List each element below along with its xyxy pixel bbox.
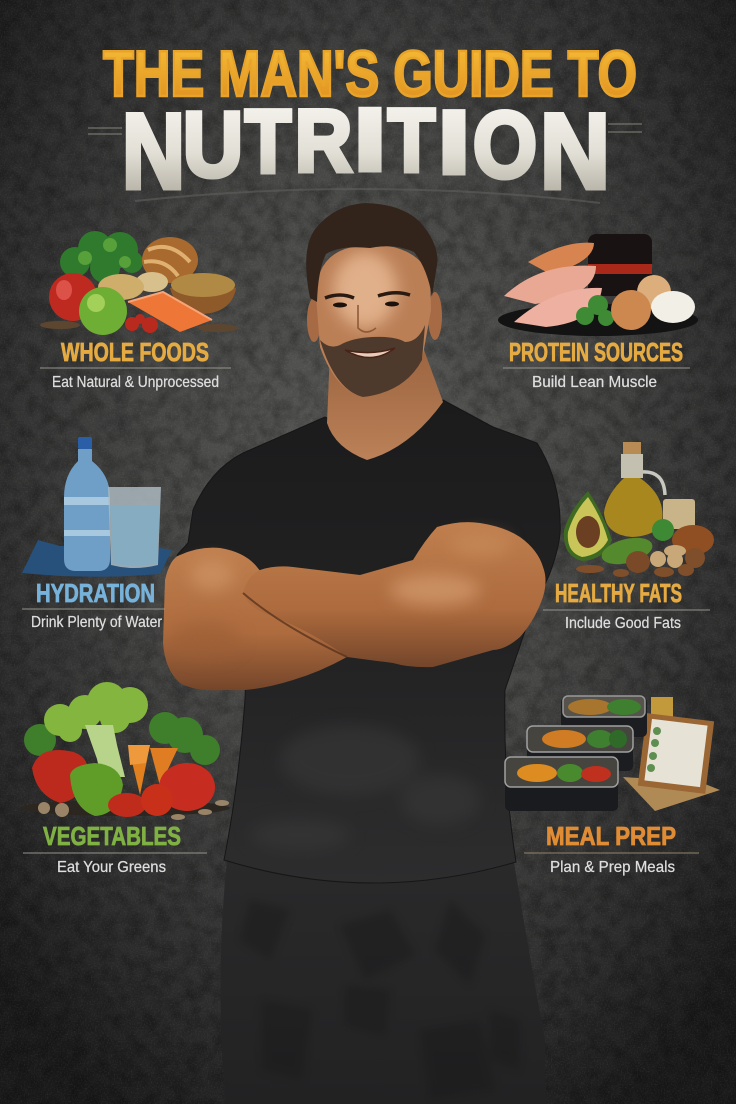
title line: nutrition: U xyxy=(183,94,243,196)
eyebrows xyxy=(325,293,410,298)
heading: hydration: HYDRATION xyxy=(36,578,155,608)
icon: hydration xyxy=(22,437,172,577)
title line: nutrition: N xyxy=(540,91,610,211)
shorts camo shading xyxy=(240,900,520,1100)
arm crease xyxy=(243,593,347,657)
nose xyxy=(358,305,376,332)
eyes xyxy=(333,302,399,308)
panel: vegetables xyxy=(20,682,230,876)
smile xyxy=(345,348,395,358)
arm: right forearm on top xyxy=(243,522,546,667)
heading: whole foods: WHOLE FOODS xyxy=(61,337,209,367)
shorts xyxy=(220,850,546,1104)
hair xyxy=(306,203,437,302)
title line: nutrition: R xyxy=(295,91,352,190)
shirt torso xyxy=(177,400,560,883)
icon: healthy fats xyxy=(564,442,714,577)
face highlight xyxy=(333,252,397,328)
title xyxy=(103,37,637,211)
title line: nutrition: T xyxy=(388,90,435,190)
caption: protein sources: Build Lean Muscle xyxy=(532,374,657,391)
head xyxy=(316,245,431,397)
arm highlights xyxy=(170,533,510,658)
neck xyxy=(327,350,443,460)
panel: hydration xyxy=(22,437,172,631)
ears xyxy=(307,292,442,342)
beard xyxy=(320,325,425,397)
icon: vegetables xyxy=(20,682,230,820)
panel: healthy fats xyxy=(543,442,714,632)
arm: left upper arm and fist xyxy=(163,548,347,690)
panel: protein sources xyxy=(498,234,698,391)
heading: vegetables: VEGETABLES xyxy=(43,821,181,851)
caption: healthy fats: Include Good Fats xyxy=(565,615,681,632)
title line: nutrition xyxy=(122,90,610,211)
panel: meal prep xyxy=(505,696,720,876)
caption: vegetables: Eat Your Greens xyxy=(57,859,166,876)
title line: nutrition: I xyxy=(354,90,386,189)
panel: whole foods xyxy=(40,231,238,391)
title line: nutrition: N xyxy=(122,91,185,211)
caption: meal prep: Plan & Prep Meals xyxy=(550,859,675,876)
title line: nutrition: O xyxy=(473,92,537,197)
shirt mottling xyxy=(250,725,480,851)
icon: whole foods xyxy=(40,231,238,335)
title underline arc xyxy=(135,189,600,203)
heading: meal prep: MEAL PREP xyxy=(546,821,676,851)
title line: nutrition: I xyxy=(438,92,470,192)
icon: protein sources xyxy=(498,234,698,336)
caption: hydration: Drink Plenty of Water xyxy=(31,614,163,631)
caption: whole foods: Eat Natural & Unprocessed xyxy=(52,374,219,391)
man figure xyxy=(163,203,560,1104)
icon: meal prep xyxy=(505,696,720,811)
title line: nutrition: T xyxy=(245,91,291,191)
